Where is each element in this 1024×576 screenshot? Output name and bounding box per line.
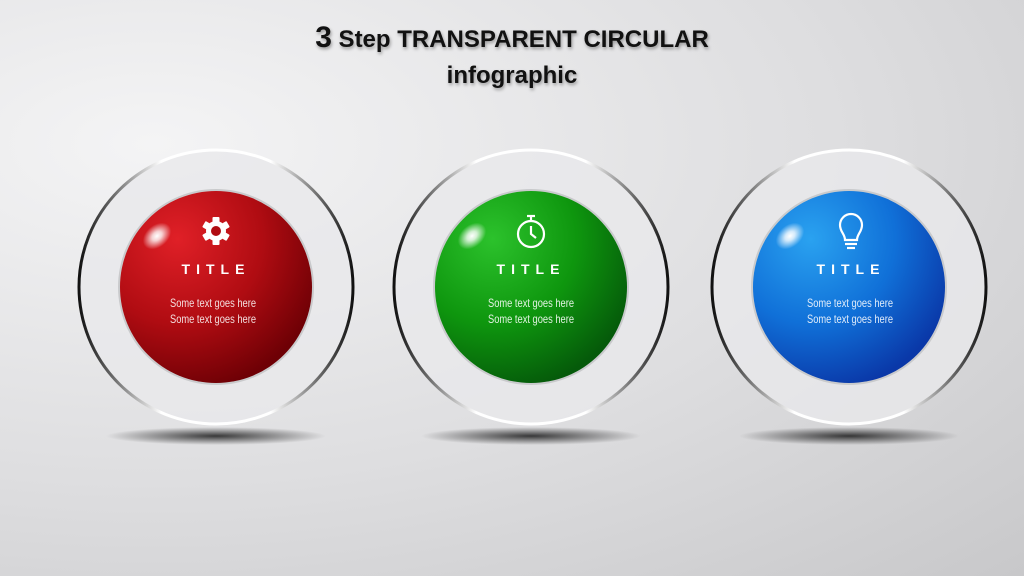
panel: step 1 red: TITLE	[182, 261, 250, 277]
title: infographic	[447, 62, 577, 89]
icon: gear	[202, 217, 230, 245]
panel: step 3 blue: Some text goes here	[807, 312, 893, 326]
icon: stopwatch	[518, 216, 544, 247]
panel: step 2 green: Some text goes here	[488, 296, 574, 310]
panel: step 3 blue	[712, 150, 986, 445]
panel: step 1 red: Some text goes here	[170, 296, 256, 310]
panel: step 2 green: Some text goes here	[488, 312, 574, 326]
panel: step 2 green	[394, 150, 668, 445]
panel: step 3 blue: TITLE	[817, 261, 885, 277]
panel: step 3 blue: Some text goes here	[807, 296, 893, 310]
title	[315, 21, 710, 92]
icon: lightbulb	[840, 214, 862, 248]
panel: step 1 red: Some text goes here	[170, 312, 256, 326]
panel: step 2 green: TITLE	[497, 261, 565, 277]
panel: step 1 red	[79, 150, 353, 445]
title: 3 Step TRANSPARENT CIRCULAR	[315, 21, 709, 54]
